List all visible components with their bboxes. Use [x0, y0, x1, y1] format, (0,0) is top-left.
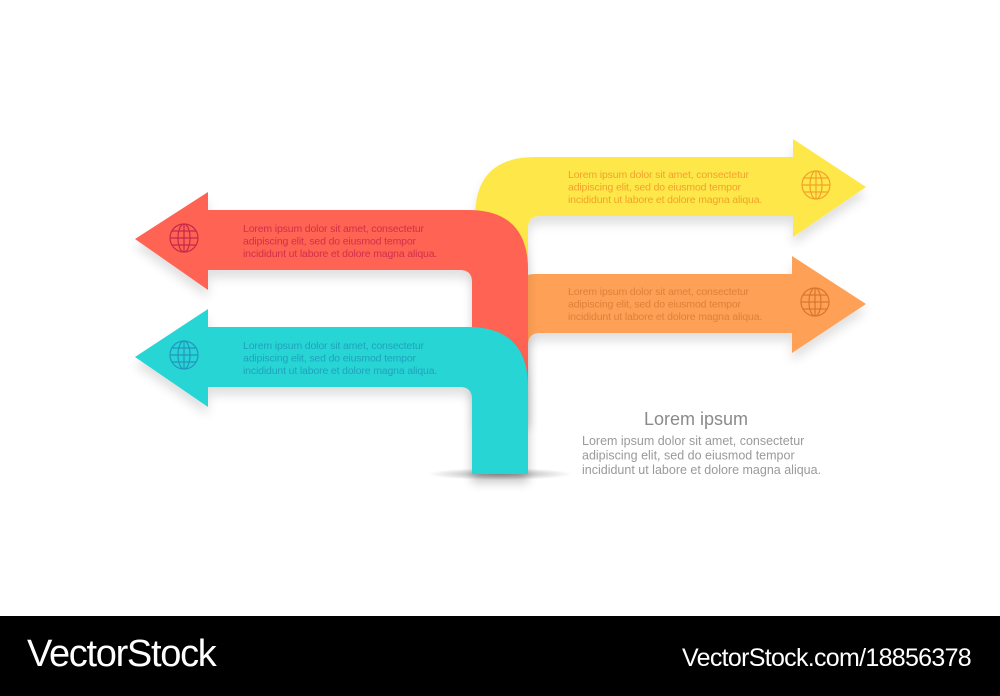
icon: globe teal — [170, 341, 198, 369]
arrow: teal: Lorem ipsum dolor sit amet, consectetur — [243, 340, 425, 352]
icon: globe red — [170, 224, 198, 252]
bottom text block: adipiscing elit, sed do eiusmod tempor — [582, 448, 795, 462]
arrow: teal: incididunt ut labore et dolore magna aliqua. — [243, 365, 437, 377]
arrow: yellow: Lorem ipsum dolor sit amet, consectetur — [568, 169, 750, 181]
arrow: orange: Lorem ipsum dolor sit amet, consectetur — [568, 286, 750, 298]
footer id: VectorStock.com/18856378 — [682, 644, 971, 672]
arrow: yellow: incididunt ut labore et dolore magna aliqua. — [568, 194, 762, 206]
arrow: red: adipiscing elit, sed do eiusmod tempor — [243, 236, 417, 248]
arrow: yellow — [475, 139, 866, 420]
arrow: red — [135, 192, 528, 474]
bottom text block — [582, 409, 821, 477]
arrow: orange: incididunt ut labore et dolore magna aliqua. — [568, 311, 762, 323]
arrow: teal: adipiscing elit, sed do eiusmod tempor — [243, 352, 417, 364]
arrow: red: Lorem ipsum dolor sit amet, consectetur — [243, 223, 425, 235]
arrow: orange — [520, 256, 866, 420]
icon: globe yellow — [802, 171, 830, 199]
icon: globe orange — [801, 288, 829, 316]
footer logo: VectorStock — [27, 633, 215, 675]
arrow: yellow: adipiscing elit, sed do eiusmod tempor — [568, 182, 742, 194]
footer bar — [0, 616, 1000, 696]
stem shadow — [428, 468, 572, 480]
bottom text block: Lorem ipsum dolor sit amet, consectetur — [582, 434, 804, 448]
arrow: teal — [135, 309, 528, 474]
bottom text block: Lorem ipsum — [644, 409, 748, 429]
bottom text block: incididunt ut labore et dolore magna aliqua. — [582, 463, 821, 477]
arrow: orange: adipiscing elit, sed do eiusmod tempor — [568, 298, 742, 310]
arrow: red: incididunt ut labore et dolore magna aliqua. — [243, 248, 437, 260]
